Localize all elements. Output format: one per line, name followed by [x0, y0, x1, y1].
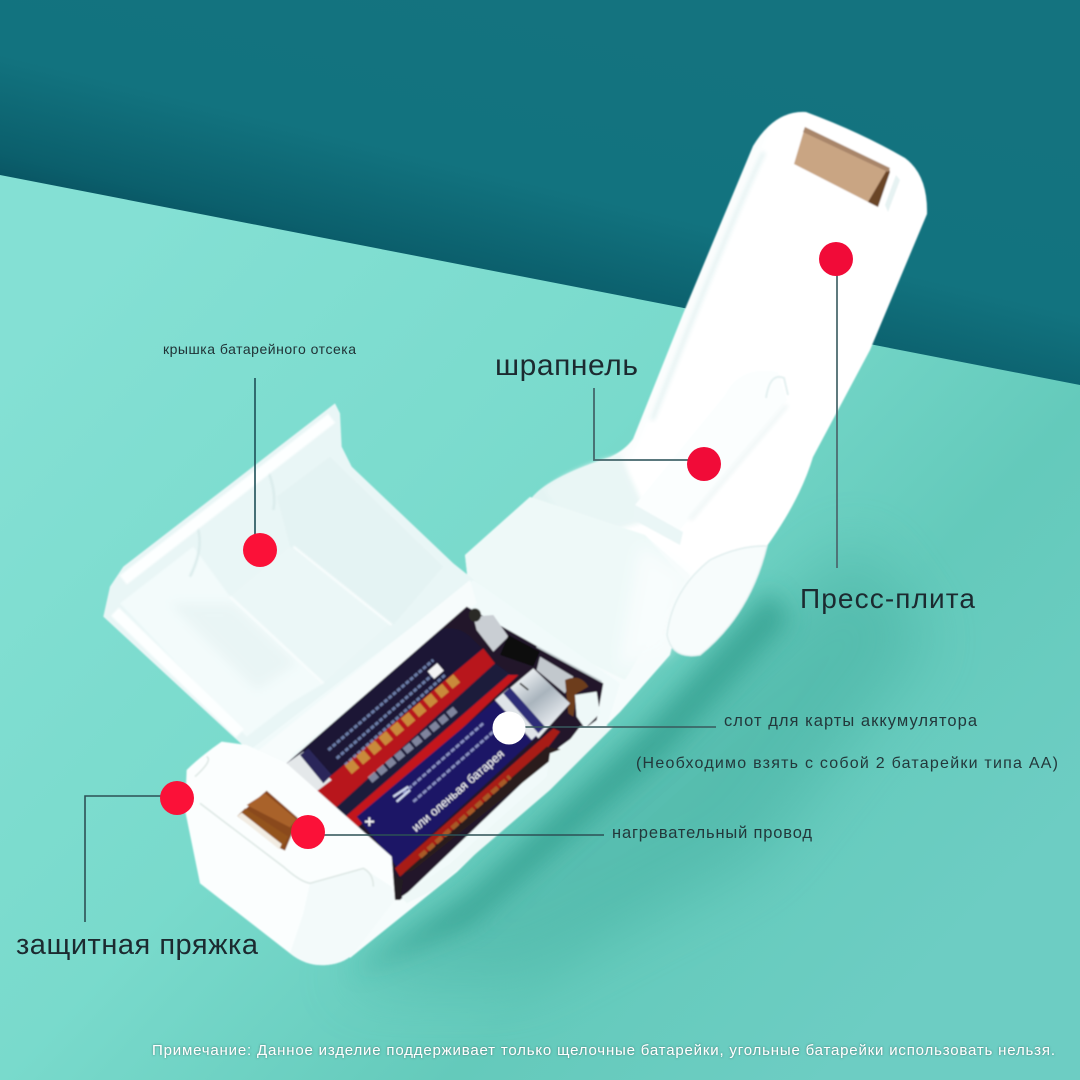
terminals [469, 608, 600, 728]
footnote: Примечание: Данное изделие поддерживает только щелочные батарейки, угольные батарейки использовать нельзя. [152, 1042, 1055, 1059]
lower red edge and ridges [395, 728, 560, 877]
battery cover lid [103, 403, 487, 767]
callout: heating wire [291, 815, 812, 849]
marker dot [291, 815, 325, 849]
marker dot [819, 242, 853, 276]
label: слот для карты аккумулятора [724, 712, 978, 730]
callout: battery cover [163, 341, 356, 567]
leader line [520, 726, 716, 728]
marker dot [243, 533, 277, 567]
label: Пресс-плита [800, 583, 975, 614]
lid rim [115, 418, 332, 733]
device: bag sealer [103, 112, 927, 965]
lower pad [237, 791, 298, 851]
shrapnel spring tab [634, 371, 788, 545]
battery compartment [250, 580, 620, 903]
red strip between batteries [342, 675, 518, 828]
marker dot [687, 447, 721, 481]
device shadow on table [340, 540, 930, 985]
hinge disc [667, 546, 767, 656]
label: защитная пряжка [16, 929, 259, 961]
battery note: (Необходимо взять с собой 2 батарейки типа АА) [636, 755, 1058, 772]
well [287, 607, 603, 900]
lid troughs [120, 457, 443, 737]
upper pad [794, 127, 890, 207]
battery brand text: или оленьая батарея [409, 747, 507, 835]
compartment lower rim [402, 727, 613, 903]
battery one [287, 628, 512, 822]
callout: safety buckle [16, 781, 259, 961]
main body [320, 497, 767, 958]
marker dot [160, 781, 194, 815]
label: нагревательный провод [612, 824, 812, 842]
battery two [357, 668, 570, 867]
callout: shrapnel [495, 349, 721, 481]
compartment inner walls [250, 580, 620, 900]
leader line [85, 796, 166, 922]
background: dark teal wall [0, 0, 1080, 400]
leader line [594, 388, 692, 460]
leader line [320, 834, 604, 836]
callout: press plate [800, 242, 975, 614]
callout: battery slot [492, 712, 1058, 772]
label: крышка батарейного отсека [163, 341, 356, 357]
press arm with upper heating pad [530, 112, 927, 600]
marker dot [492, 712, 526, 744]
leader line [254, 378, 256, 540]
label: шрапнель [495, 349, 638, 382]
front block with lower heating pad [185, 742, 395, 965]
leader line [836, 270, 838, 568]
